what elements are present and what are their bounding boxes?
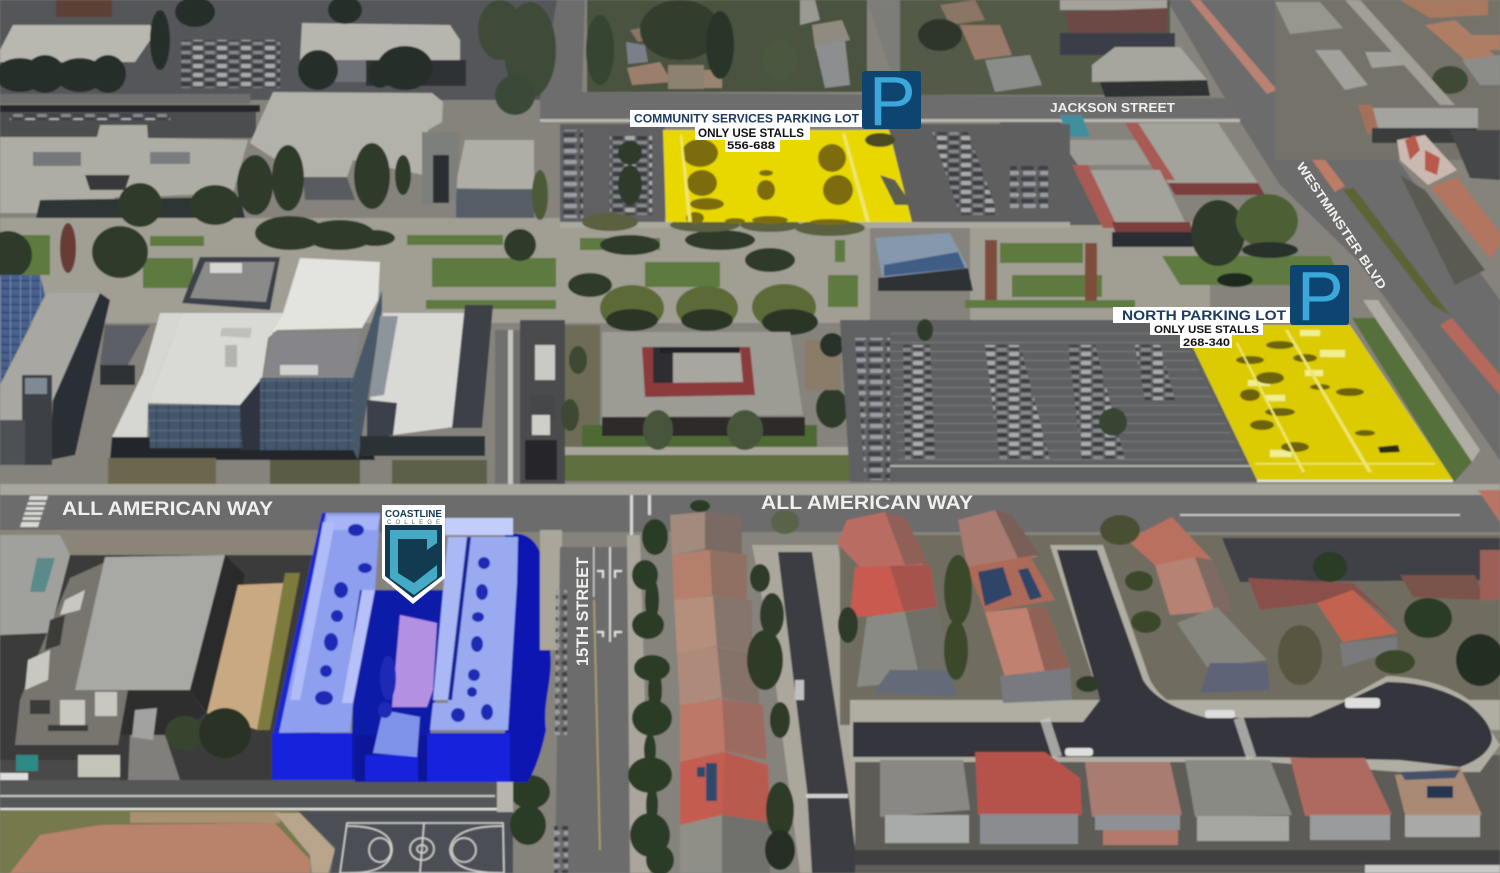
highlighted building: blue	[272, 513, 560, 782]
callout: north parking lot: NORTH PARKING LOT	[1122, 308, 1287, 323]
road label: All American Way west: ALL AMERICAN WAY	[62, 499, 273, 520]
logo: Coastline College shield marker	[382, 505, 445, 604]
campus quad paving and lawns	[0, 218, 1345, 323]
callout: north parking lot: 268-340	[1183, 337, 1230, 349]
road label: All American Way east: ALL AMERICAN WAY	[761, 493, 973, 514]
road label: 15th Street: 15TH STREET	[574, 557, 592, 666]
logo: Coastline College shield marker: COASTLINE	[385, 509, 442, 520]
Jackson Street	[540, 0, 1240, 122]
east side buildings	[1275, 0, 1500, 285]
palm tree row	[628, 500, 799, 873]
quad trees	[0, 143, 795, 297]
community services yellow highlighted lot	[663, 130, 912, 225]
south residential area	[840, 535, 1500, 873]
north-west buildings	[0, 0, 534, 218]
community services lot surroundings	[532, 124, 1070, 236]
south road and sports field	[0, 775, 550, 873]
callout: community services parking lot: ONLY USE STALLS	[698, 128, 804, 140]
north campus science buildings	[0, 257, 520, 485]
Westminster Boulevard	[1167, 0, 1500, 482]
blue roof pavilion	[875, 233, 973, 291]
west residential street	[747, 545, 880, 873]
callout: community services parking lot: COMMUNITY SERVICES PARKING LOT	[634, 112, 860, 126]
central square office building	[565, 284, 857, 481]
north yellow highlighted lot	[1182, 325, 1453, 482]
logo: Coastline College shield marker: COLLEGE	[387, 520, 440, 526]
townhouse cluster	[837, 510, 1100, 703]
central parking strip and maintenance area	[520, 320, 600, 485]
east house cluster	[1100, 515, 1500, 693]
north-east commercial buildings	[1000, 0, 1298, 287]
road label: Jackson Street: JACKSON STREET	[1050, 101, 1175, 115]
road label: Westminster Blvd: WESTMINSTER BLVD	[1294, 160, 1389, 292]
icon: parking sign north lot: P	[1297, 257, 1344, 335]
north campus parking and roads	[0, 0, 560, 138]
callout: north parking lot	[1113, 307, 1291, 349]
15th Street road	[540, 530, 650, 873]
icon: parking sign community services: P	[869, 62, 916, 140]
townhouse row	[670, 512, 770, 873]
All American Way road	[0, 484, 1500, 535]
south-west buildings	[0, 530, 320, 790]
north parking lot asphalt and cars	[840, 319, 1260, 482]
bottom house row	[855, 752, 1500, 873]
callout: community services parking lot: 556-688	[727, 140, 775, 152]
callout: community services parking lot	[630, 110, 862, 152]
callout: north parking lot: ONLY USE STALLS	[1154, 324, 1259, 336]
north neighbourhood houses	[478, 0, 1170, 115]
